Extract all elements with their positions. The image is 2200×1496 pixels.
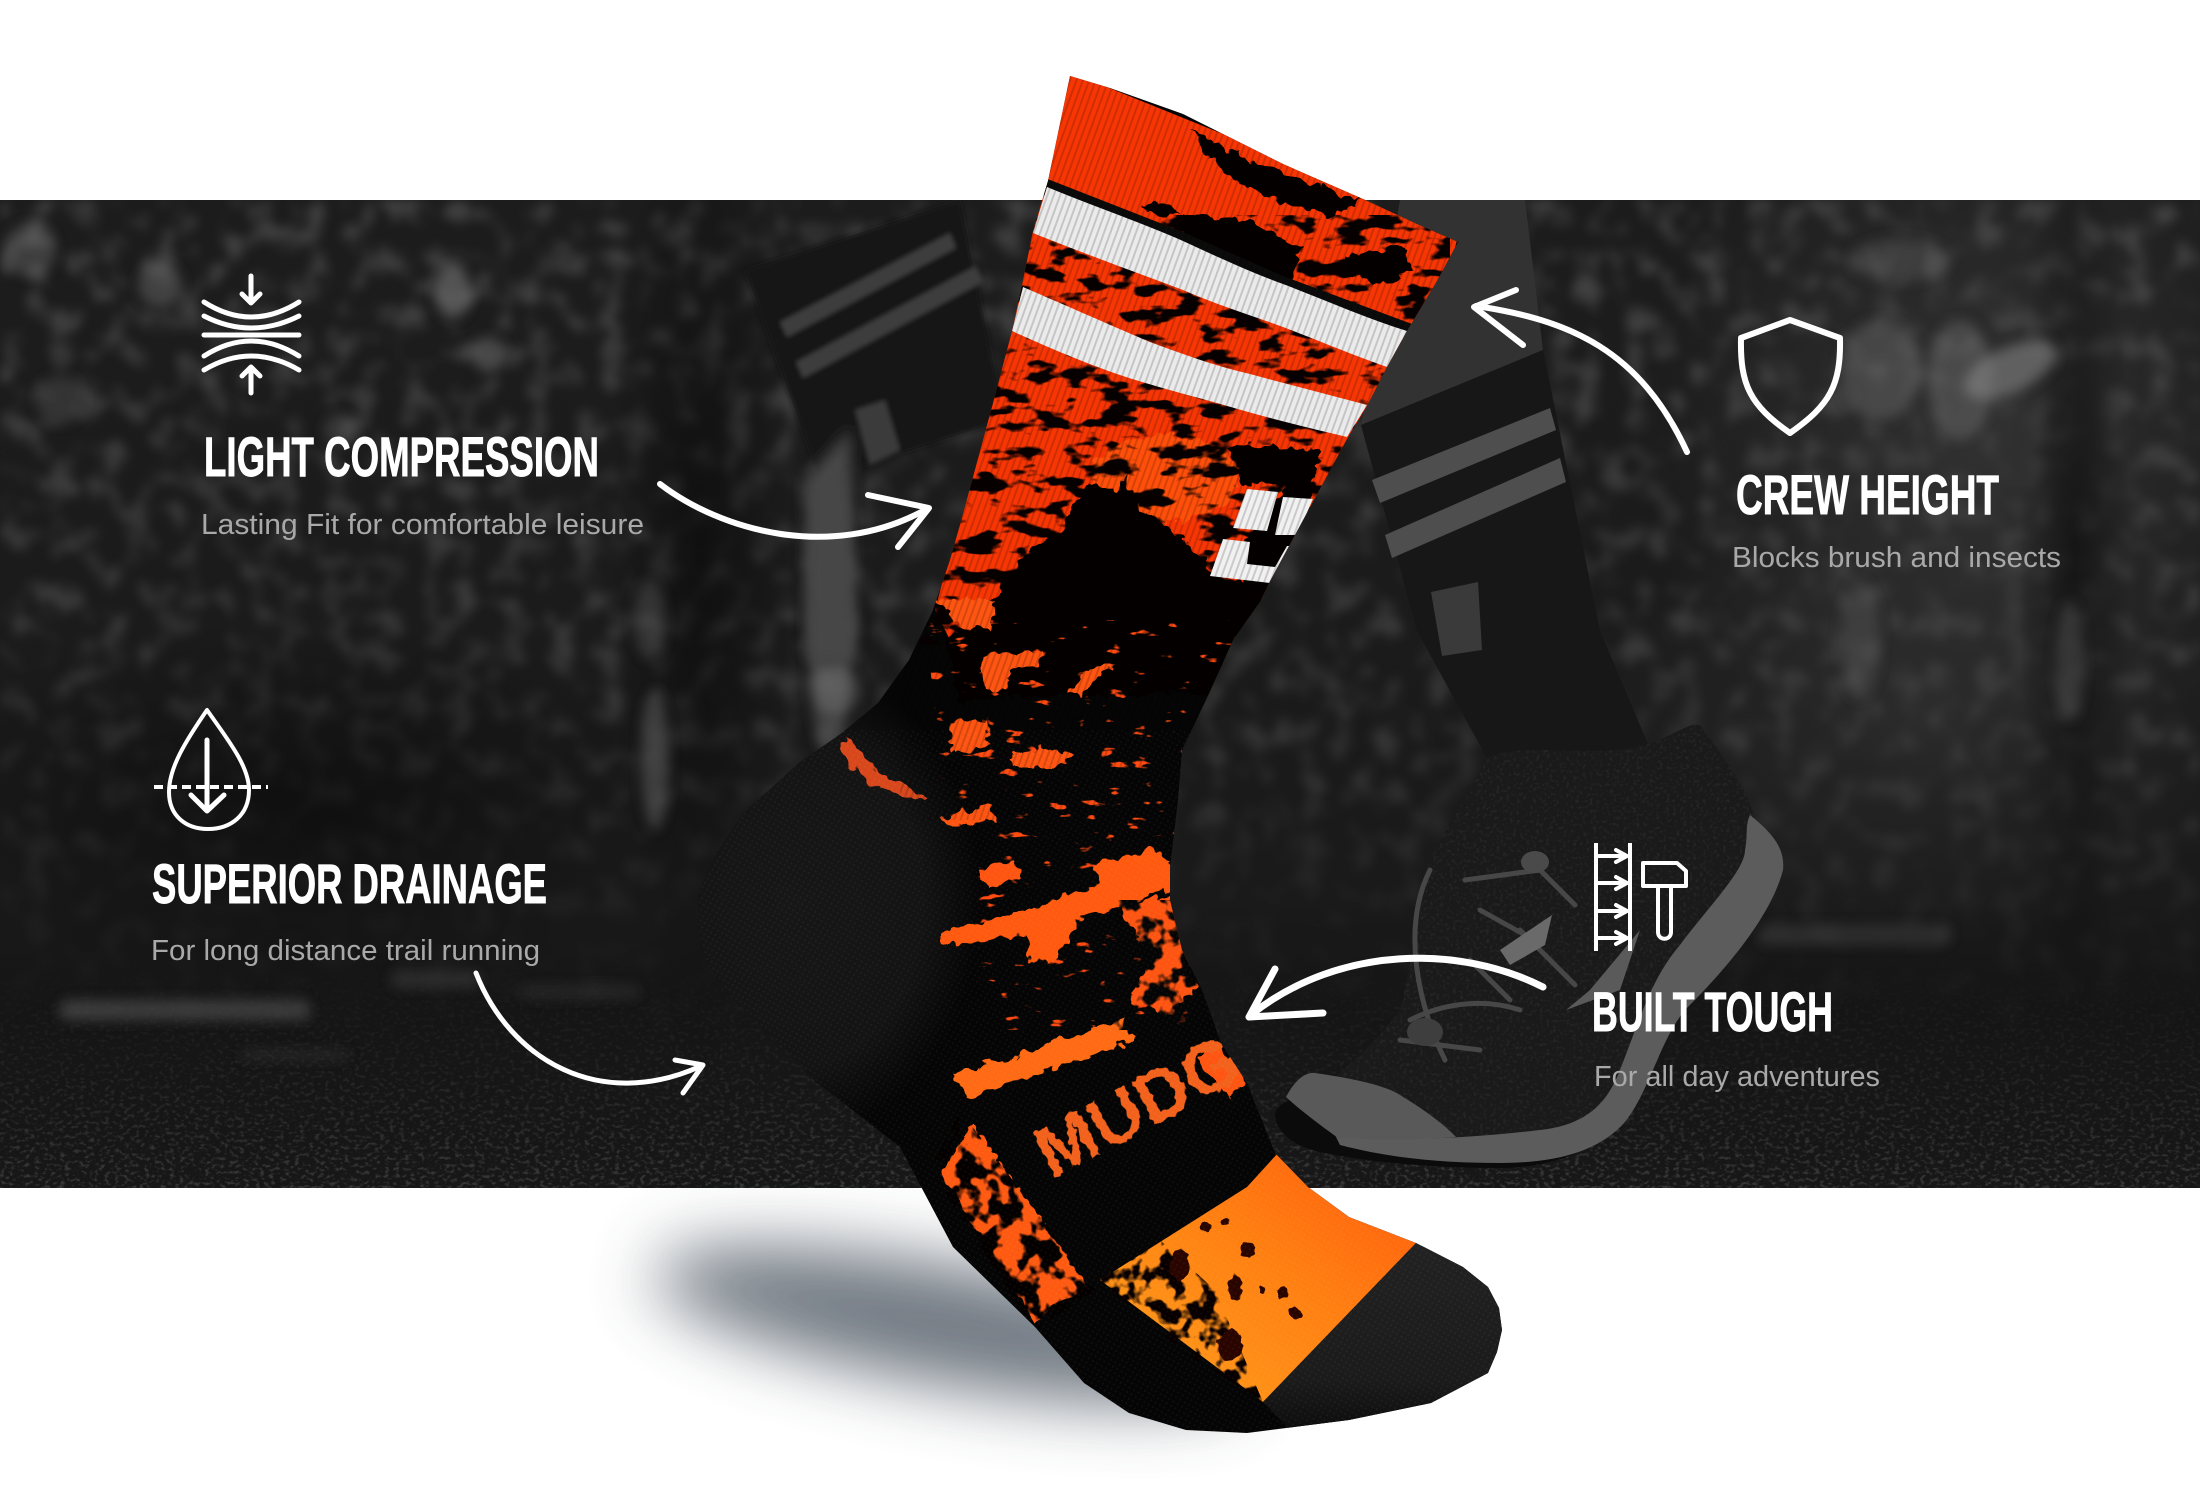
description: Lasting Fit for comfortable leisure (201, 509, 644, 541)
icon: wall and hammer (1596, 843, 1686, 951)
toe cap (1263, 1243, 1502, 1428)
product: running sock (698, 76, 1502, 1433)
icon: shield (1741, 320, 1840, 433)
arrow: crew height to cuff (1474, 290, 1687, 452)
description: Blocks brush and insects (1732, 542, 2061, 574)
lower leg flame print (840, 598, 1245, 1100)
panel: dark forest photo band (0, 200, 2200, 1188)
icon: water drop with arrow (154, 710, 268, 829)
outer foot print panel (942, 1124, 1088, 1324)
sock ground shadow (644, 1214, 1256, 1436)
arrow: compression to sock (660, 484, 929, 547)
sock heel (698, 719, 949, 1094)
heading: SUPERIOR DRAINAGE (152, 852, 547, 915)
knit texture (680, 60, 1520, 1450)
description: For all day adventures (1594, 1061, 1880, 1093)
panel: light compression (201, 276, 644, 541)
panel: crew height (1732, 320, 2061, 574)
front leg and calf sock silhouette (1361, 200, 1648, 751)
rear leg silhouette (745, 200, 1005, 660)
cuff and upper leg print (920, 60, 1460, 700)
sock stripes (1012, 178, 1412, 437)
sock wordmark: MUDG (1022, 1020, 1254, 1194)
panel: superior drainage (151, 710, 547, 967)
trail shoe silhouette (1275, 725, 1783, 1168)
icon: compression (204, 276, 299, 393)
heading: LIGHT COMPRESSION (204, 425, 599, 488)
heading: CREW HEIGHT (1736, 463, 1999, 526)
sock logo (1210, 489, 1313, 583)
description: For long distance trail running (151, 935, 540, 967)
panel: built tough (1592, 843, 1880, 1093)
heading: BUILT TOUGH (1592, 980, 1833, 1043)
arrow: drainage to heel (476, 973, 703, 1093)
toe panel (1100, 1153, 1416, 1402)
arrow: built tough to midfoot (1249, 958, 1543, 1017)
